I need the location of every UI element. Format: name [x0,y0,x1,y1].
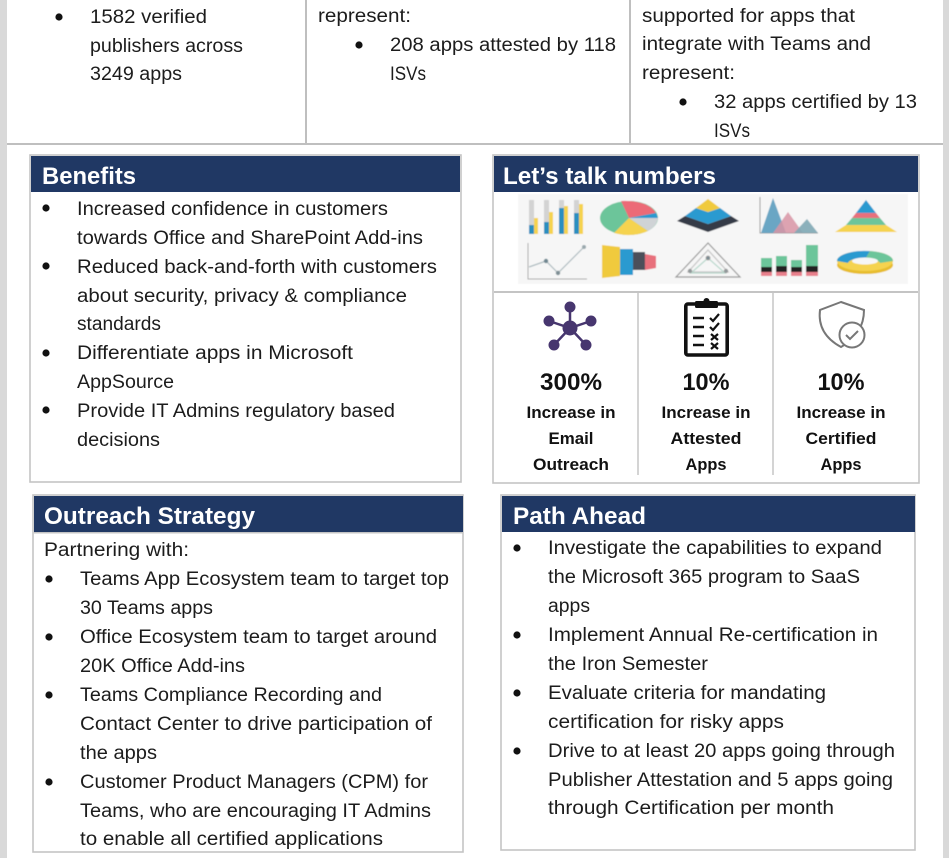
path ahead list: Evaluate criteria for mandating [548,683,826,704]
column: verified publishers [55,7,243,85]
thumbnail: funnel [602,245,656,278]
column: attested apps: represent: [318,6,411,27]
outreach list: Customer Product Managers (CPM) for [80,772,429,793]
stat: attested apps: Apps [686,455,726,474]
stat: email outreach: Email [548,429,594,448]
outreach list: Partnering with: [44,540,189,561]
heading: outreach strategy: Outreach Strategy [44,503,256,530]
benefits list: Provide IT Admins regulatory based [77,401,395,422]
benefits list: decisions [77,430,160,451]
column: attested apps: ISVs [390,64,426,85]
chart thumbnails [518,194,908,284]
outreach list: Contact Center to drive participation of [80,714,433,735]
stat: email outreach: 300% [540,369,602,396]
column: certified apps: represent: [642,63,735,84]
icon: clipboard checklist [686,298,727,355]
heading: benefits: Benefits [42,163,136,190]
column: attested apps: 208 apps attested by 118 [390,35,616,56]
stat: certified apps [796,302,886,474]
column: verified publishers: 3249 apps [90,64,182,85]
benefits list: towards Office and SharePoint Add-ins [77,228,423,249]
outreach list: 20K Office Add-ins [80,656,245,677]
panel: benefits [30,155,461,482]
panel: let's talk numbers [493,155,919,483]
panel: path ahead [501,495,915,850]
outreach list [44,540,449,850]
icon: shield with check [820,302,864,348]
column: certified apps: integrate with Teams and [642,34,871,55]
thumbnail: bar chart [529,200,583,234]
benefits list: about security, privacy & compliance [77,286,407,307]
stat: attested apps: Attested [670,429,742,448]
column: verified publishers: publishers across [90,36,243,57]
column: certified apps: 32 apps certified by 13 [714,92,917,113]
stat: attested apps: Increase in [662,403,750,422]
benefits list: Differentiate apps in Microsoft [77,343,354,364]
path ahead list [513,538,895,819]
stat: attested apps [662,298,750,474]
path ahead list: certification for risky apps [548,712,784,733]
benefits list: standards [77,314,161,335]
column: verified publishers: 1582 verified [90,7,207,28]
path ahead list: through Certification per month [548,798,834,819]
stat: certified apps: Apps [820,455,862,474]
outreach list: to enable all certified applications [80,829,383,850]
stat: email outreach [526,302,616,474]
benefits list: AppSource [77,372,174,393]
column: attested apps [318,6,616,85]
stat: attested apps: 10% [682,369,730,396]
thumbnail: radar triangle [676,243,740,277]
column: certified apps: supported for apps that [642,6,856,27]
path ahead list: the Iron Semester [548,654,709,675]
column: certified apps: ISVs [714,121,750,142]
panel: top table [55,6,917,142]
path ahead list: the Microsoft 365 program to SaaS [548,567,860,588]
thumbnail: area chart [760,197,818,233]
benefits list: Reduced back-and-forth with customers [77,257,437,278]
outreach list: Teams App Ecosystem team to target top [80,569,449,590]
path ahead list: Publisher Attestation and 5 apps going [548,770,893,791]
stat: email outreach: Increase in [526,403,616,422]
path ahead list: Implement Annual Re-certification in [548,625,878,646]
thumbnail: line chart [528,243,587,279]
benefits list [42,199,437,451]
thumbnail: donut [837,251,893,274]
thumbnail: stacked bars [761,245,818,276]
stat: certified apps: Increase in [796,403,886,422]
stat: certified apps: 10% [818,369,864,396]
path ahead list: apps [548,596,590,617]
outreach list: the apps [80,743,157,764]
heading: let's talk numbers: Let’s talk numbers [503,163,716,190]
thumbnail: pie chart [600,201,658,235]
benefits list: Increased confidence in customers [77,199,388,220]
panel: outreach strategy [33,495,463,852]
outreach list: Teams, who are encouraging IT Admins [80,801,431,822]
outreach list: 30 Teams apps [80,598,213,619]
icon: network [544,302,596,350]
outreach list: Teams Compliance Recording and [80,685,382,706]
outreach list: Office Ecosystem team to target around [80,627,437,648]
thumbnail: 3d pyramid [677,199,739,232]
stat: email outreach: Outreach [533,455,609,474]
path ahead list: Investigate the capabilities to expand [548,538,882,559]
stat: certified apps: Certified [806,429,876,448]
path ahead list: Drive to at least 20 apps going through [548,741,895,762]
thumbnail: layered pyramid [835,200,897,232]
column: certified apps [642,6,917,142]
heading: path ahead: Path Ahead [513,503,646,530]
